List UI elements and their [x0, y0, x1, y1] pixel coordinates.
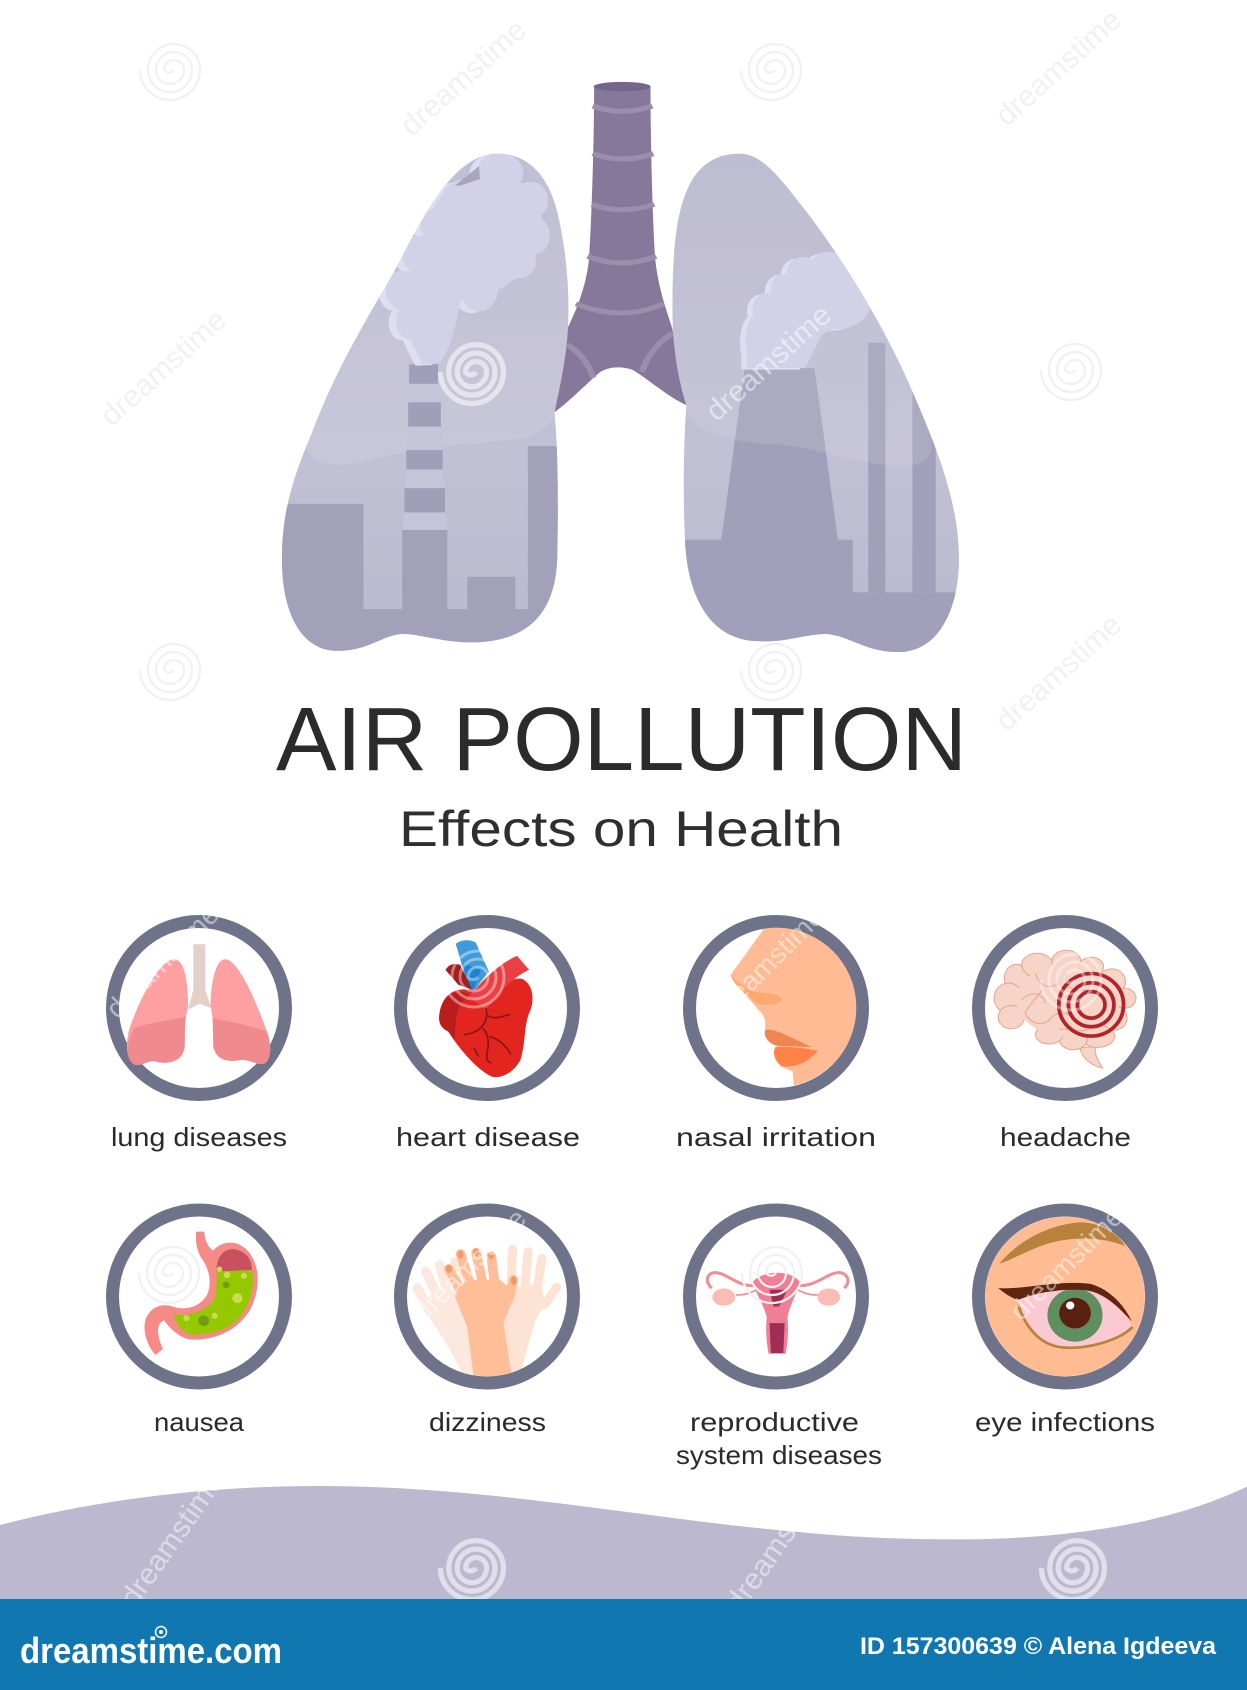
icon: nasal irritation	[730, 928, 856, 1086]
right lung	[670, 150, 964, 657]
icon: eye infections	[985, 1217, 1145, 1376]
trachea	[554, 82, 686, 413]
center hand	[449, 1253, 515, 1378]
label: reproductive system diseases	[676, 1407, 882, 1470]
watermark: dreamstime	[719, 1471, 836, 1618]
label: heart disease: heart disease	[396, 1122, 580, 1152]
icon ring: reproductive	[690, 1210, 862, 1383]
bottom wave	[0, 1486, 1247, 1600]
watermark: dreamstime	[114, 1466, 231, 1613]
bottom row icons	[112, 1210, 1152, 1383]
footer logo: dreamstime.com	[20, 1630, 282, 1671]
icon ring: dizziness	[400, 1210, 574, 1383]
watermark: dreamstime	[100, 899, 225, 1024]
label: nasal irritation: nasal irritation	[676, 1122, 876, 1152]
label: dizziness: dizziness	[429, 1407, 546, 1437]
illustration: lungs with polluted city	[279, 82, 964, 657]
labels: bottom row	[154, 1407, 1155, 1470]
icon: headache brain	[994, 950, 1136, 1068]
title: AIR POLLUTION	[276, 690, 967, 790]
watermark	[94, 3, 1129, 1618]
footer bar	[0, 1599, 1247, 1690]
top row icons	[112, 922, 1152, 1094]
icon: dizziness hands	[417, 1249, 557, 1378]
icon: heart disease	[439, 940, 533, 1077]
label: lung diseases: lung diseases	[111, 1122, 287, 1152]
icon ring: lung diseases	[112, 922, 286, 1094]
right faint hand	[503, 1249, 557, 1378]
icon ring: eye infections	[978, 1210, 1152, 1383]
icon ring: nasal irritation	[690, 922, 862, 1094]
watermark: dreamstime	[699, 298, 838, 428]
icon: nausea stomach	[144, 1232, 258, 1355]
label: reproductive system diseases: system diseases	[676, 1440, 882, 1470]
icon ring: nausea	[112, 1210, 286, 1383]
watermark: dreamstime	[94, 303, 233, 433]
icon ring: headache	[978, 922, 1152, 1094]
watermark: dreamstime	[1004, 1201, 1129, 1326]
icon ring: heart disease	[400, 922, 574, 1094]
icon: lung diseases	[127, 944, 270, 1065]
icon: reproductive system	[707, 1273, 848, 1354]
watermark: dreamstime	[394, 13, 533, 143]
watermark: dreamstime	[705, 901, 830, 1026]
left lung	[279, 146, 572, 657]
watermark: dreamstime	[989, 608, 1128, 738]
label: eye infections: eye infections	[975, 1407, 1155, 1437]
subtitle: Effects on Health	[399, 801, 843, 857]
watermark: dreamstime	[407, 1203, 532, 1328]
label: reproductive system diseases: reproductive	[690, 1407, 859, 1437]
label: nausea: nausea	[154, 1407, 245, 1437]
watermark: dreamstime	[989, 3, 1128, 133]
label: headache: headache	[1000, 1122, 1131, 1152]
labels: top row	[111, 1122, 1131, 1152]
left faint hand	[417, 1262, 474, 1378]
footer credit: ID 157300639 © Alena Igdeeva	[860, 1633, 1217, 1660]
